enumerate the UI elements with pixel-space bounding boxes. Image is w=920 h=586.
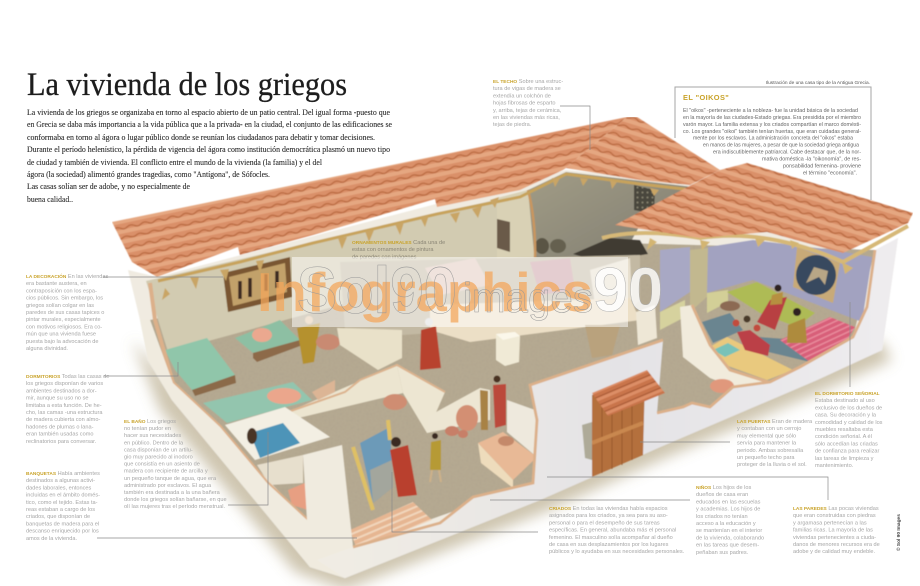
caption: las paredes: danos de menores recursos era de <box>793 542 880 548</box>
column <box>636 305 657 345</box>
caption: dormitorios: cho, las camas -una estructura <box>26 410 103 416</box>
caption: el techo: hojas fibrosas de esparto <box>493 101 556 107</box>
caption: niños: peñaban sus padres. <box>696 550 749 556</box>
caption: las paredes: LAS PAREDES Las pocas viviendas <box>793 506 879 512</box>
small figure <box>430 433 441 482</box>
caption: el dormitorio señorial: las tareas de limpieza y <box>815 456 874 462</box>
caption: dormitorios: hadones de plumas o lana- <box>26 424 94 430</box>
illustration credit line: Ilustración de una casa tipo de la Antigua Grecia. <box>766 80 870 86</box>
banquet figures <box>732 284 807 356</box>
short wall <box>507 400 538 458</box>
watermark orange text: Infographics <box>257 261 593 323</box>
left back wall <box>146 193 530 352</box>
broken wall tops left <box>150 283 307 520</box>
intro paragraph: La vivienda de los griegos se organizaba en torno al espacio abierto de un patio central. Del igual forma -puesto que <box>27 108 390 117</box>
caption: niños: en las tareas que desem- <box>696 543 759 549</box>
front wall right <box>317 238 898 578</box>
caption: la decoración: griegos solían colgar en las <box>26 303 94 309</box>
caption: niños: de la vivienda, colaborando <box>696 535 764 541</box>
caption: dormitorios: mir, aunque su uso no se <box>26 396 89 402</box>
caption: la decoración: pintar murales, especialmente <box>26 317 101 323</box>
main roof <box>112 117 720 277</box>
intro paragraph: Las casas solían ser de adobe, y no especialmente de <box>27 182 190 191</box>
watermark 90: 90 <box>593 256 663 325</box>
caption: el techo: en las viviendas más ricas, <box>493 115 560 121</box>
caption: el dormitorio señorial: exclusivo de los dueños de <box>815 405 882 411</box>
oikos body text: mente por los esclavos. La administración concreta del "oikos" estaba <box>693 136 854 142</box>
caption: la decoración: con motivos religiosos. Era co- <box>26 324 102 330</box>
broken wall tops right <box>353 250 875 547</box>
caption: el techo: EL TECHO Sobre una estruc- <box>493 79 563 85</box>
oikos body text <box>683 108 861 176</box>
caption: el baño: EL BAÑO Los griegos <box>124 419 176 425</box>
intro paragraph: conformaba en torno al ágora o lugar público donde se reunían los ciudadanos para debatir y tomar decisiones. <box>27 133 375 142</box>
oikos body text: en manos de las mujeres, a pesar de que la sociedad griega antigua <box>703 142 860 148</box>
caption: niños: NIÑOS Los hijos de los <box>696 485 751 491</box>
caption: el baño: no tenían pudor en <box>124 426 171 432</box>
caption: el dormitorio señorial: Estaba destinado al uso <box>815 398 875 404</box>
caption: el dormitorio señorial: condición señorial. A él <box>815 434 872 440</box>
lavender walls of the bedroom <box>660 240 872 330</box>
front wall left <box>140 320 353 578</box>
room behind watermark <box>340 255 640 342</box>
caption: las paredes: viviendas pertenecientes a ciuda- <box>793 535 876 541</box>
caption: el dormitorio señorial: sólo accedían las criadas <box>815 441 878 447</box>
caption: la decoración: cios públicos. Sin embargo, los <box>26 296 103 302</box>
caption: dormitorios: de madera cubierta con almo- <box>26 417 100 423</box>
caption: banquetas: dades laborales, entonces <box>26 485 92 491</box>
caption: el dormitorio señorial: muebles resaltaba esta <box>815 427 874 433</box>
bath <box>225 407 330 460</box>
caption: banquetas: tico, como el tejido. Estas ta- <box>26 500 98 506</box>
image credit: © Sol 90 Images <box>895 514 902 551</box>
caption: dormitorios: los griegos disponían de varios <box>26 381 103 387</box>
caption: criados: públicos y lo ayudaba en sus necesidades personales. <box>549 549 685 555</box>
caption: el baño: madera con recipiente de arcilla y <box>124 469 208 475</box>
watermark outlined word: images <box>463 274 593 321</box>
caption: el baño: olí las mujeres tras el período menstrual. <box>124 504 225 510</box>
table <box>478 432 537 488</box>
caption: las paredes: adobe y de calidad muy endeble. <box>793 549 876 555</box>
dark bed <box>573 238 648 262</box>
caption: la decoración: contraposición con los espa- <box>26 288 97 294</box>
woman at the loom <box>390 437 417 497</box>
oikos body text: ponsabilidad femenina- proviene <box>783 164 861 170</box>
low interior wall <box>337 328 402 370</box>
caption: la decoración: mún que una vivienda fuese <box>26 332 96 338</box>
caption: niños: y academias. Los hijos de <box>696 507 760 513</box>
caption: criados: específicas. En general, abundaba más el personal <box>549 528 676 534</box>
caption: las puertas: muy elemental que sólo <box>737 433 796 439</box>
caption: niños: acceso a la educación y <box>696 521 756 527</box>
red figure near door <box>493 376 506 428</box>
loom with cloth <box>353 420 393 510</box>
caption: el dormitorio señorial: de confianza para realizar <box>815 449 880 455</box>
caption: banquetas: reas estaban a cargo de los <box>26 507 95 513</box>
red figure <box>420 318 441 370</box>
panel: el oikos <box>675 87 871 200</box>
caption: dormitorios: ambientes destinados a dor- <box>26 388 97 394</box>
bowl on courtyard <box>383 394 407 410</box>
caption: criados: personal o para el desempeño de sus tareas <box>549 520 660 526</box>
intro paragraph <box>27 108 392 204</box>
caption: el baño: en público. Dentro de la <box>124 440 184 446</box>
caption: niños: educados en las escuelas <box>696 499 761 505</box>
caption: dormitorios: eran también usadas como <box>26 432 93 438</box>
eave beams <box>158 174 908 300</box>
caption: las puertas: proteger de la lluvia o el sol. <box>737 462 807 468</box>
distant figure <box>585 325 620 358</box>
caption: banquetas: descanso enriquecido por los <box>26 529 99 535</box>
caption: las puertas: servía para mantener la <box>737 441 797 447</box>
pillar with tapestry <box>497 190 535 270</box>
oikos body text: El "oikos" -perteneciente a la nobleza- fue la unidad básica de la sociedad <box>683 108 858 114</box>
watermark outlined logo: Sol90 <box>297 253 457 327</box>
cushion on floor <box>710 379 734 393</box>
quarter wall <box>680 305 768 387</box>
caption: criados: asignados para los criados, ya sea para su aso- <box>549 513 668 519</box>
caption: la decoración: alguna divinidad. <box>26 346 68 352</box>
bench <box>350 502 432 550</box>
right roof <box>615 163 913 253</box>
caption: dormitorios: limitaba a esta función. De he- <box>26 403 102 409</box>
caption: banquetas: BANQUETAS Había ambientes <box>26 471 100 477</box>
caption: la decoración: paredes de sus casas tapices o <box>26 310 104 316</box>
intro paragraph: ágora (la sociedad) alimentó grandes tragedias, como "Antígona", de Sófocles. <box>27 170 270 179</box>
caption: la decoración: LA DECORACIÓN En las viviendas <box>26 274 108 280</box>
stone patch <box>582 422 592 460</box>
caption: las puertas: y contaban con un cerrojo <box>737 426 801 432</box>
oikos body text: mativa doméstica -la "oikonomía", de res- <box>762 156 861 162</box>
title: La vivienda de los griegos <box>27 67 347 103</box>
pedestal <box>496 332 520 366</box>
intro paragraph: de ciudad y también de vivienda. El conflicto entre el mundo de la vivienda (la familia) y el del <box>27 158 323 167</box>
wall tapestry <box>223 257 292 312</box>
caption: banquetas: banquetas de madera para el <box>26 521 99 527</box>
caption: las puertas: periodo. Ambas sobresalía <box>737 448 804 454</box>
caption: las paredes: y argamasa pertenecían a las <box>793 520 867 526</box>
caption: las puertas: LAS PUERTAS Eran de madera <box>737 419 812 425</box>
intro paragraph: Durante el período helenístico, la pérdida de vigencia del ágora como institución democrática plasmó un nuevo tipo <box>27 145 390 154</box>
watermark <box>257 253 663 327</box>
caption: las paredes: que eran construidas con piedras <box>793 513 876 519</box>
outer walls silhouette <box>128 170 898 578</box>
caption: el dormitorio señorial: EL DORMITORIO SEÑORIAL <box>815 390 880 397</box>
pots <box>535 238 566 254</box>
oikos body text: co. Los grandes "oikoi" también tenían huertas, que eran cuidadas general- <box>683 129 861 135</box>
caption: el techo: y, arriba, tejas de cerámica, <box>493 108 562 114</box>
caption: el techo: extendía un colchón de <box>493 93 551 99</box>
awning <box>592 370 665 416</box>
caption: el dormitorio señorial: casa. Su decoración y la <box>815 413 877 419</box>
caption: ornamentos: estas con ornamentos de pintura <box>352 247 434 253</box>
caption: las puertas: un pequeño techo para <box>737 455 795 461</box>
door <box>592 378 645 477</box>
oikos heading: EL "OIKOS" <box>683 93 729 102</box>
caption: niños: se mantenían en el interior <box>696 528 762 534</box>
caption: ornamentos: ORNAMENTOS MURALES Cada una de <box>352 240 445 246</box>
caption: el dormitorio señorial: comodidad y calidad de los <box>815 420 883 426</box>
caption: el baño: un pequeño tanque de agua, que era <box>124 476 217 482</box>
amphora <box>445 405 478 438</box>
caption: el baño: casa disponían de un artilu- <box>124 447 193 453</box>
caption: dormitorios: DORMITORIOS Todas las casas de <box>26 374 109 380</box>
caption: el baño: donde los griegos solían bañarse, en que <box>124 497 227 503</box>
green bed left <box>165 338 236 396</box>
back room <box>497 172 693 270</box>
oikos body text: era indiscutiblemente patriarcal. Cabe destacar que, de la nor- <box>713 150 861 156</box>
caption: niños: los criados no tenían <box>696 514 748 520</box>
door post <box>480 390 488 430</box>
caption: banquetas: destinados a algunas activi- <box>26 478 95 484</box>
caption: la decoración: puesta bajo la advocación de <box>26 339 98 345</box>
caption: el baño: hacer sus necesidades <box>124 433 181 439</box>
floor <box>150 240 875 547</box>
caption: criados: de casa en sus desplazamientos por los lugares <box>549 542 669 548</box>
bowl <box>316 334 340 350</box>
oikos body text: varón mayor. La familia extensa y los criados compartían el marco domésti- <box>683 122 861 128</box>
standing figure in yellow <box>297 316 320 364</box>
ground shadow <box>132 340 892 586</box>
green bed back <box>235 320 300 362</box>
oikos body text: en la mayoría de las ciudades-Estado griegas. Era presidida por el miembro <box>683 115 861 121</box>
caption: el baño: administrado por esclavos. El agua <box>124 483 212 489</box>
caption: el techo: tejas de piedra. <box>493 122 532 128</box>
small room <box>257 455 308 510</box>
caption: banquetas: incluidas en el ámbito domés- <box>26 493 100 499</box>
caption: el techo: tura de vigas de madera se <box>493 86 561 92</box>
caption: la decoración: era bastante austera, en <box>26 281 87 287</box>
caption: banquetas: amos de la vivienda. <box>26 536 77 542</box>
caption: el baño: gio muy parecido al inodoro <box>124 454 193 460</box>
caption: banquetas: criados, que disponían de <box>26 514 90 520</box>
caption: dormitorios: reclinatorios para conversar. <box>26 439 97 445</box>
caption: niños: dueños de casa eran <box>696 492 748 498</box>
caption: el baño: también era destinada a la una bañera <box>124 490 221 496</box>
oikos body text: el término "economía". <box>803 170 857 176</box>
interior divider walls <box>288 365 445 433</box>
bedroom floor details <box>702 282 855 380</box>
medallion painting <box>793 247 840 303</box>
caption: criados: CRIADOS En todas las viviendas había espacios <box>549 506 668 512</box>
intro paragraph: buena calidad.. <box>27 195 73 204</box>
leader lines <box>97 106 850 538</box>
caption: el dormitorio señorial: mantenimiento. <box>815 463 854 469</box>
intro paragraph: en Grecia se daba más importancia a la vida pública que a la privada- en la ciudad, el conjunto de las edificaciones se <box>27 120 392 129</box>
caption: el baño: que consistía en un asiento de <box>124 462 200 468</box>
lattice window <box>634 185 655 214</box>
caption: ornamentos: de paredes con imágenes <box>352 254 417 260</box>
illustration: cutaway Greek house <box>112 117 913 586</box>
room 3 wall <box>427 388 490 433</box>
caption: las paredes: familias ricas. La mayoría de las <box>793 528 873 534</box>
caption: criados: femenino. El masculino solía acompañar al dueño <box>549 535 673 541</box>
green bed front <box>203 382 312 423</box>
